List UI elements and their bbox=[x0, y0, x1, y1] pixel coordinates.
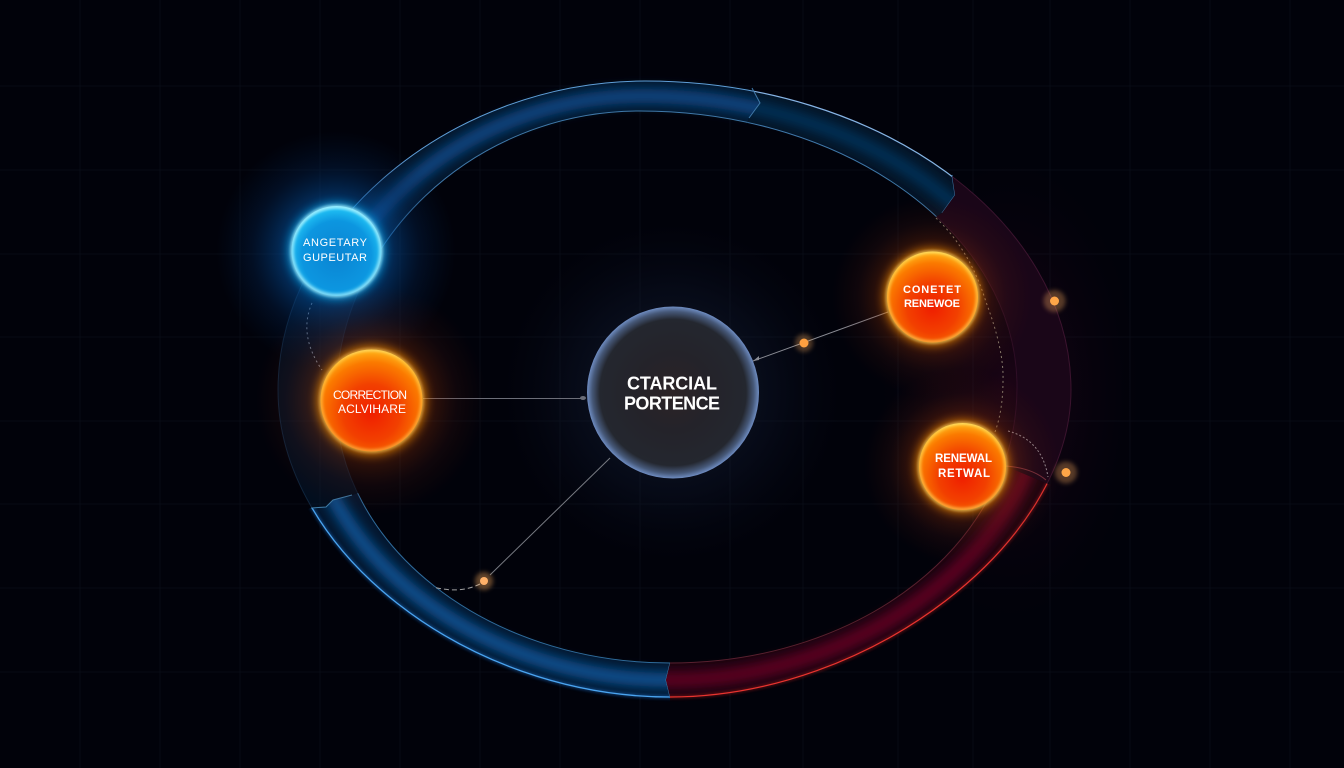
dot: lower left bbox=[475, 572, 493, 590]
ring: faint left band bbox=[278, 284, 358, 508]
ring: top blue segment, left part bbox=[352, 80, 760, 249]
blue node label: ANGETARY bbox=[303, 237, 368, 249]
left orange node label: ACLVIHARE bbox=[338, 402, 406, 416]
upper right node label: CONETET bbox=[903, 284, 961, 296]
ring: top blue segment, right part bbox=[748, 90, 954, 217]
dashed connector: right ring bbox=[936, 218, 1048, 480]
ring: top segment dividers bbox=[749, 88, 955, 213]
ring: bottom blue segment bbox=[308, 493, 670, 700]
glow: blue node bbox=[216, 131, 456, 371]
ring: faint right band bbox=[936, 176, 1072, 484]
ring: bottom segment dividers bbox=[311, 495, 670, 697]
dot: lower right bbox=[1055, 462, 1077, 484]
glow: left orange node bbox=[256, 285, 486, 515]
lower right node label: RENEWAL bbox=[935, 453, 992, 465]
glow: upper right orange node bbox=[832, 197, 1032, 397]
node: lower right orange bbox=[916, 420, 1008, 512]
blue node label bbox=[303, 237, 368, 264]
dashed connector: blue node to left orange node bbox=[307, 303, 322, 370]
connector: left node to center bbox=[423, 396, 586, 400]
connector: center to upper right node bbox=[753, 312, 888, 361]
center node label: CTARCIAL bbox=[627, 374, 717, 394]
left orange node label bbox=[333, 388, 407, 416]
node: blue bbox=[290, 204, 384, 298]
left orange node label: CORRECTION bbox=[333, 388, 407, 402]
node: upper right orange bbox=[884, 249, 980, 345]
ring: bottom red segment bbox=[666, 468, 1050, 700]
center node bbox=[587, 306, 759, 478]
node: left orange bbox=[318, 346, 426, 454]
center node label: PORTENCE bbox=[624, 394, 720, 414]
blue node label: GUPEUTAR bbox=[303, 252, 367, 264]
lower right node label bbox=[935, 453, 992, 480]
dot: center right bbox=[795, 334, 813, 352]
center node label bbox=[624, 374, 720, 414]
upper right node label bbox=[903, 284, 961, 310]
lower right node label: RETWAL bbox=[938, 468, 990, 480]
upper right node label: RENEWOE bbox=[904, 298, 960, 310]
glow: lower right orange node bbox=[864, 368, 1060, 564]
connector: center to lower left dot bbox=[433, 458, 610, 590]
dot: upper right bbox=[1044, 290, 1066, 312]
